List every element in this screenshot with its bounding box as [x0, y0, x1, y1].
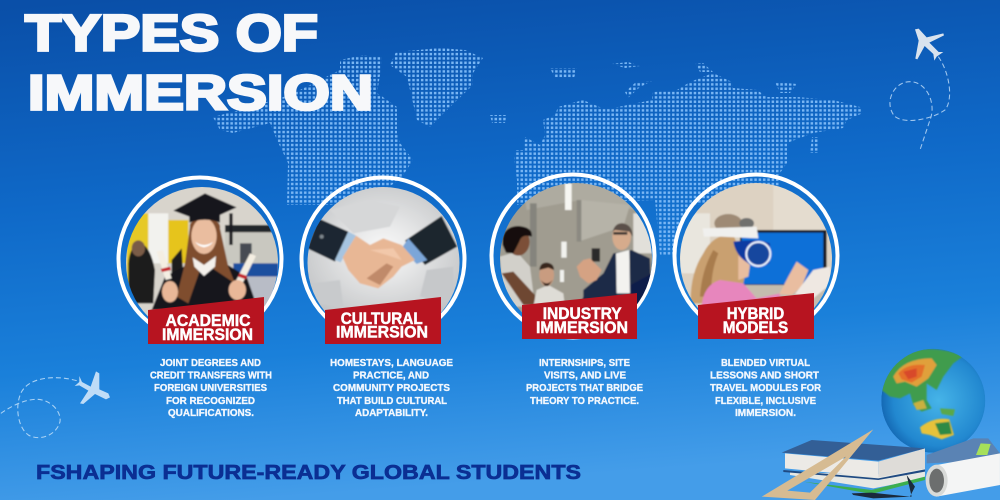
- description: HOMESTAYS, LANGUAGE: [330, 357, 453, 369]
- description: [710, 357, 821, 419]
- description: QUALIFICATIONS.: [168, 407, 254, 419]
- description: VISITS, AND LIVE: [544, 370, 626, 382]
- photo ring: [118, 178, 282, 340]
- description: BLENDED VIRTUAL: [721, 357, 811, 369]
- description: FLEXIBLE, INCLUSIVE: [715, 395, 816, 407]
- dotted world map: [213, 48, 863, 255]
- photo: graduate holding diplomas: [126, 187, 278, 316]
- banner: [325, 297, 441, 344]
- photo ring: [674, 174, 838, 338]
- footer tagline: FSHAPING FUTURE-READY GLOBAL STUDENTS: [36, 462, 581, 484]
- banner heading: [723, 305, 788, 337]
- description: THEORY TO PRACTICE.: [530, 395, 639, 407]
- description: LESSONS AND SHORT: [710, 370, 820, 382]
- description: FOR RECOGNIZED: [166, 395, 255, 407]
- title: [25, 4, 373, 120]
- panel: cultural immersion: [300, 178, 467, 419]
- description: INTERNSHIPS, SITE: [539, 357, 630, 369]
- description: CREDIT TRANSFERS WITH: [150, 370, 272, 382]
- description: ADAPTABILITY.: [355, 407, 428, 419]
- photo: girl with VR headset: [680, 183, 832, 308]
- illustration: globe, books, ruler and scroll: [762, 349, 1000, 500]
- icon: globe: [881, 349, 985, 453]
- photo ring: [302, 178, 464, 340]
- panel: industry immersion: [492, 174, 657, 407]
- banner heading: [536, 305, 628, 337]
- photo: handshake: [308, 187, 460, 312]
- banner heading: CULTURAL: [341, 310, 423, 328]
- title: IMMERSION: [28, 66, 373, 120]
- description: PRACTICE, AND: [353, 370, 429, 382]
- icon: stacked books and scroll: [762, 429, 1000, 500]
- description: IMMERSION.: [735, 407, 796, 419]
- description: FOREIGN UNIVERSITIES: [154, 382, 267, 394]
- banner: [148, 297, 264, 344]
- banner heading: HYBRID: [727, 305, 784, 323]
- banner: [698, 293, 814, 339]
- panel: hybrid models: [674, 174, 838, 419]
- description: TRAVEL MODULES FOR: [710, 382, 821, 394]
- description: PROJECTS THAT BRIDGE: [526, 382, 643, 394]
- banner heading: IMMERSION: [162, 326, 253, 344]
- description: [330, 357, 453, 419]
- description: [150, 357, 272, 419]
- description: THAT BUILD CULTURAL: [337, 395, 448, 407]
- banner heading: MODELS: [723, 319, 788, 337]
- title: TYPES OF: [25, 4, 318, 62]
- photo ring: [492, 174, 654, 338]
- description: COMMUNITY PROJECTS: [333, 382, 450, 394]
- banner heading: IMMERSION: [336, 324, 428, 342]
- banner heading: ACADEMIC: [166, 312, 251, 330]
- banner: [522, 293, 637, 339]
- panel: academic immersion: [118, 178, 287, 419]
- banner heading: INDUSTRY: [543, 305, 622, 323]
- description: [526, 357, 643, 407]
- banner heading: [162, 312, 253, 344]
- icon: airplane with dashed trail, lower left: [0, 371, 110, 438]
- banner heading: IMMERSION: [536, 319, 628, 337]
- description: JOINT DEGREES AND: [160, 357, 261, 369]
- icon: airplane with dashed trail, top right: [890, 29, 950, 150]
- banner heading: [336, 310, 428, 342]
- photo: professional speaking to trainees: [500, 183, 652, 312]
